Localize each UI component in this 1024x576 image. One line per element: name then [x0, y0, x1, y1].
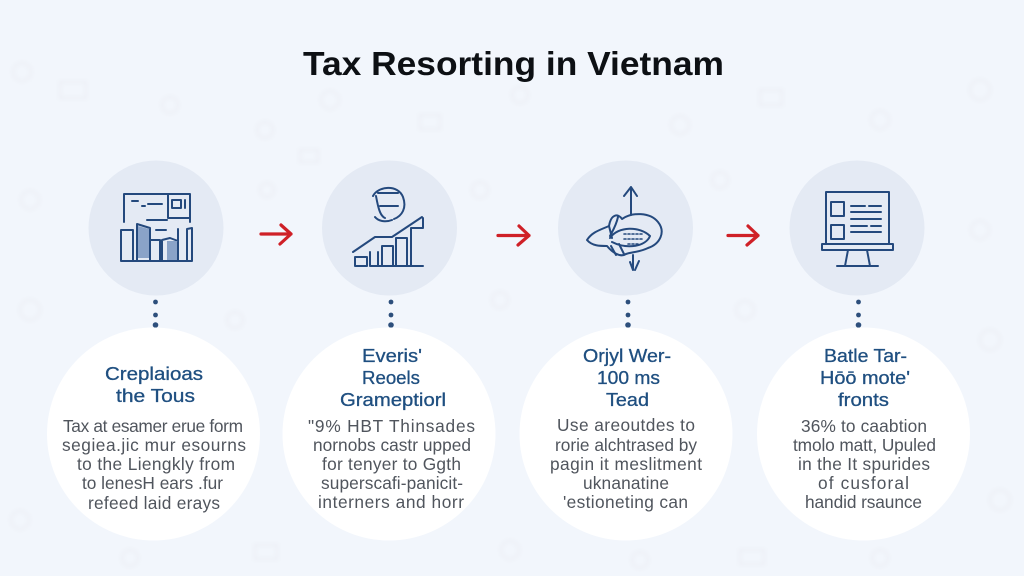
heading 2: [340, 346, 446, 410]
heading 3: 100 ms: [597, 368, 660, 388]
step 4: icon badge: [790, 160, 924, 296]
body text 2: [308, 416, 475, 512]
heading 1: the Tous: [116, 386, 195, 406]
badge circle 4: [790, 160, 924, 296]
dotted connector 3: [625, 300, 631, 328]
heading 1: [105, 364, 203, 406]
body text 1: to the Liengkly from: [77, 454, 235, 474]
body text 2: for tenyer to Ggth: [322, 454, 461, 474]
body text 3: [550, 415, 702, 512]
icon: globe and rising bars: [353, 188, 423, 266]
body text 2: interners and horr: [318, 492, 464, 512]
heading 3: [583, 346, 671, 410]
dotted connector 2: [388, 300, 394, 328]
body text 2: nornobs castr upped: [313, 435, 471, 455]
body text 3: pagin it meslitment: [550, 454, 702, 474]
body text 2: superscafi-panicit-: [321, 473, 463, 493]
heading 1: Creplaioas: [105, 364, 203, 384]
body text 3: 'estioneting can: [563, 492, 688, 512]
arrow 2: [498, 226, 529, 245]
icon: hand holding with vertical arrow: [587, 187, 662, 270]
body text 3: rorie alchtrased by: [555, 435, 697, 455]
body text 4: [793, 416, 936, 512]
heading 4: [820, 346, 910, 410]
badge circle 3: [558, 160, 693, 296]
body text 4: handid rsaunce: [805, 492, 922, 512]
arrow 3: [728, 226, 758, 245]
body text 4: of cusforal: [818, 473, 909, 493]
panel: step 1 text: [47, 328, 260, 540]
body text 1: refeed laid erays: [88, 493, 220, 513]
heading 4: fronts: [838, 390, 889, 410]
title: Tax Resorting in Vietnam: [303, 45, 724, 82]
step 3: icon badge: [558, 160, 693, 296]
heading 3: Tead: [606, 390, 649, 410]
heading 4: Batle Tar-: [824, 346, 907, 366]
heading 3: Orjyl Wer-: [583, 346, 671, 366]
icon: monitor with form: [822, 192, 893, 266]
body text 2: "9% HBT Thinsades: [308, 416, 475, 436]
heading 2: Grameptiorl: [340, 390, 446, 410]
arrow 1: [261, 225, 291, 244]
panel: step 2 text: [282, 328, 496, 540]
badge circle 1: [88, 160, 224, 296]
heading 4: Hōō mote': [820, 368, 910, 388]
dotted connector 1: [153, 300, 158, 328]
step 1: icon badge: [88, 160, 224, 296]
heading 2: Reoels: [362, 368, 420, 388]
badge circle 2: [322, 160, 457, 296]
icon: dashboard and city buildings: [121, 194, 192, 261]
step 2: icon badge: [322, 160, 457, 296]
body text 4: 36% to caabtion: [801, 416, 927, 436]
body text 1: [62, 416, 246, 513]
body text 1: Tax at esamer erue form: [63, 416, 243, 436]
panel: step 3 text: [520, 328, 732, 540]
dotted connector 4: [856, 300, 861, 328]
heading 2: Everis': [362, 346, 422, 366]
body text 4: tmolo matt, Upuled: [793, 435, 936, 455]
body text 4: in the It spurides: [798, 454, 930, 474]
body text 1: to lenesH ears .fur: [82, 473, 223, 493]
body text 1: segiea.jic mur esourns: [62, 435, 246, 455]
panel: step 4 text: [757, 328, 970, 540]
body text 3: Use areoutdes to: [557, 415, 695, 435]
body text 3: uknanatine: [583, 473, 669, 493]
